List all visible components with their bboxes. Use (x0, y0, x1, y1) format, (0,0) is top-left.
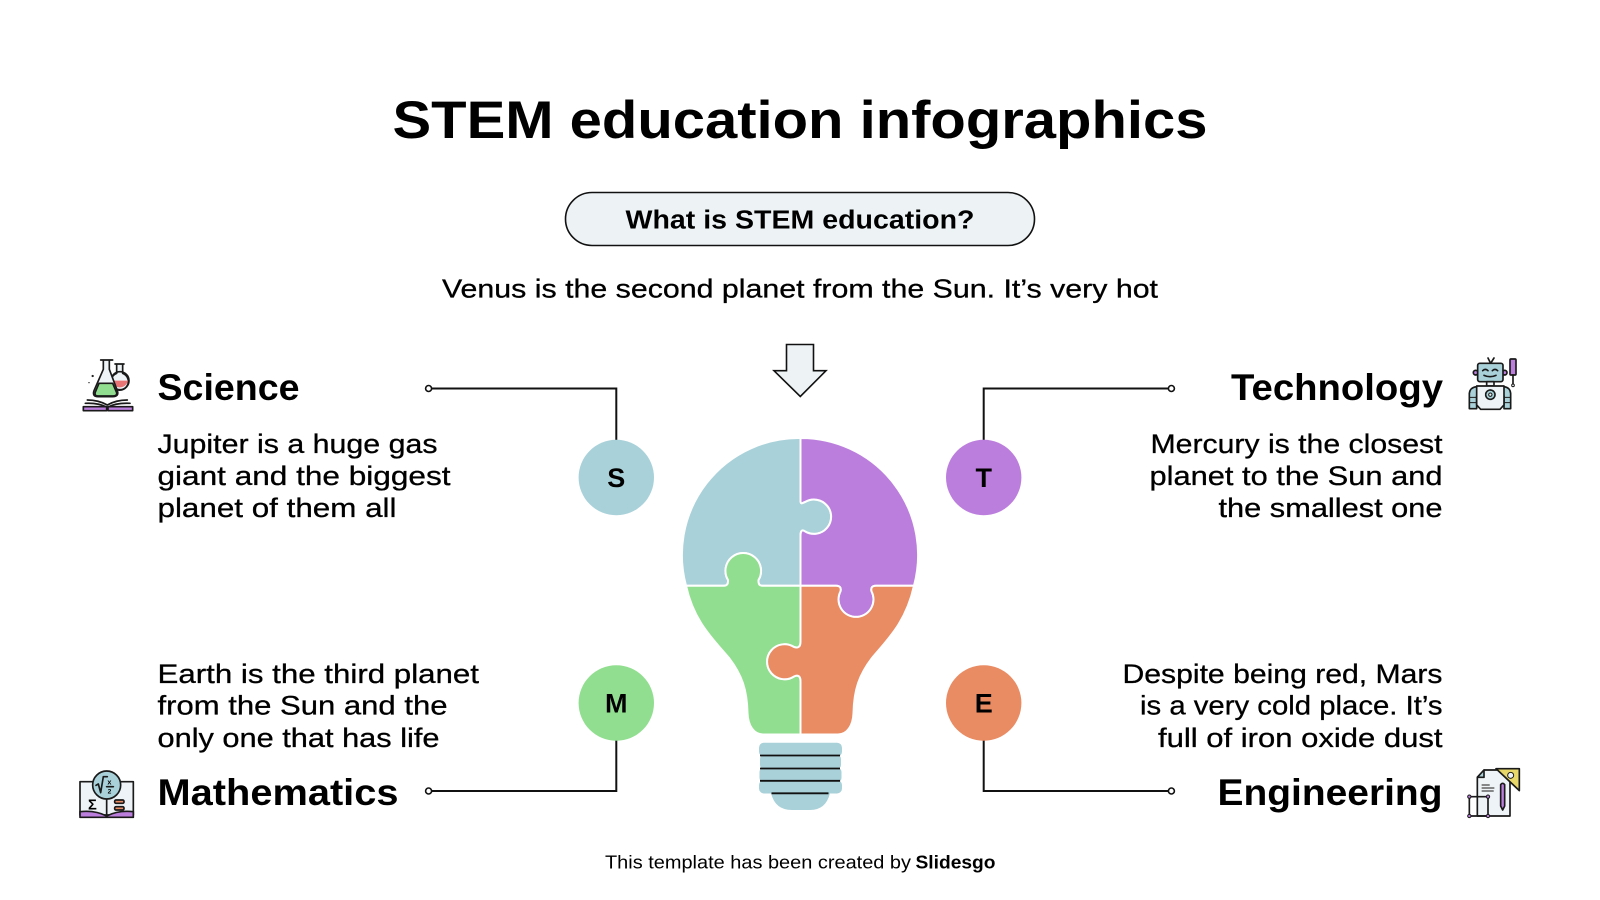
heading: Technology: Technology (1231, 367, 1443, 408)
icon: robot (1469, 358, 1516, 409)
footer credit: This template has been created by (605, 852, 911, 872)
footer credit: Slidesgo (916, 852, 996, 872)
subtitle: Venus is the second planet from the Sun. It’s very hot (442, 274, 1159, 304)
icon: engineering document and tools (1468, 769, 1519, 818)
badge: S: S (607, 463, 625, 493)
text: Technology body (1150, 429, 1443, 523)
text: Engineering body: is a very cold place. It’s (1140, 690, 1442, 720)
text: Technology body: Mercury is the closest (1150, 429, 1443, 459)
connector: science (431, 388, 616, 441)
text: Mathematics body: only one that has life (158, 723, 440, 753)
puzzle piece: engineering (767, 586, 914, 734)
badge: M (579, 665, 654, 741)
connector dot: technology (1168, 386, 1174, 392)
puzzle piece: technology (800, 438, 918, 617)
connector dot: engineering (1168, 788, 1174, 794)
heading: Science: Science (158, 367, 300, 408)
text: Technology body: planet to the Sun and (1150, 461, 1442, 491)
connector: mathematics (431, 738, 616, 791)
badge: M: M (605, 688, 628, 718)
icon: science flasks and book (83, 360, 133, 411)
puzzle piece: science (682, 438, 831, 586)
light bulb puzzle (682, 438, 918, 810)
heading: Engineering: Engineering (1218, 772, 1442, 813)
heading: Mathematics: Mathematics (158, 772, 398, 813)
icon: mathematics book: Σ (88, 797, 97, 813)
badge: E: E (975, 688, 993, 718)
badge: T: T (975, 463, 992, 493)
icon: mathematics book (80, 771, 133, 817)
text: Engineering body (1122, 659, 1443, 753)
text: Science body: planet of them all (158, 493, 396, 523)
icon: mathematics book: x (107, 778, 112, 787)
question pill (566, 192, 1034, 246)
text: Technology body: the smallest one (1218, 493, 1442, 523)
text: Science body: giant and the biggest (158, 461, 451, 491)
question pill: What is STEM education? (626, 206, 974, 234)
title: STEM education infographics (392, 91, 1208, 150)
text: Mathematics body: from the Sun and the (158, 690, 448, 720)
badge: E (946, 665, 1021, 741)
connector dot: science (426, 386, 432, 392)
text: Mathematics body (158, 659, 480, 753)
badge: T (946, 440, 1021, 515)
puzzle piece: mathematics (686, 553, 800, 734)
icon: mathematics book: 2 (108, 788, 112, 795)
text: Mathematics body: Earth is the third planet (158, 659, 480, 689)
connector: technology (984, 388, 1169, 441)
text: Engineering body: Despite being red, Mars (1122, 659, 1442, 689)
text: Engineering body: full of iron oxide dust (1158, 723, 1443, 753)
badge: S (579, 440, 654, 515)
text: Science body: Jupiter is a huge gas (158, 429, 438, 459)
bulb base (759, 743, 842, 810)
connector dot: mathematics (426, 788, 432, 794)
text: Science body (158, 429, 451, 523)
connector: engineering (984, 738, 1169, 791)
arrow: down (774, 344, 826, 396)
